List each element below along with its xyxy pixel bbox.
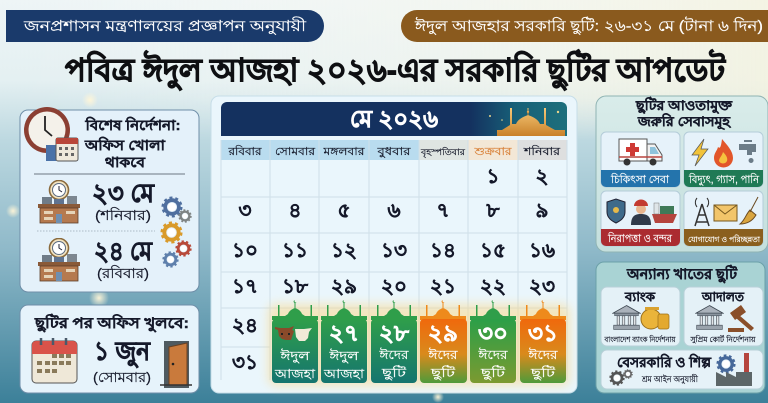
panel: other sectors	[596, 262, 765, 393]
icon: wall calendar	[32, 338, 77, 383]
icon: door	[160, 341, 192, 388]
tile: bank: ব্যাংক	[624, 290, 656, 304]
calendar dates: ১০	[232, 240, 258, 262]
tile: communication and sanitation	[684, 191, 763, 246]
panel: reopening date	[20, 305, 199, 393]
holiday tile: 29 Eid holiday: ছুটি	[430, 365, 457, 381]
icon: shield	[607, 199, 625, 223]
top right ribbon: holiday range: ঈদুল আজহার সরকারি ছুটি: ২৬-৩১ মে (টানা ৬ দিন)	[414, 17, 763, 35]
date: 1 June: (সোমবার)	[93, 369, 151, 385]
tile: court	[684, 287, 763, 346]
tile: utilities: বিদ্যুৎ, গ্যাস, পানি	[688, 173, 759, 186]
panel: calendar	[211, 96, 577, 393]
icon: small gears	[610, 370, 632, 385]
tile: security and ports: নিরাপত্তা ও বন্দর	[607, 232, 673, 245]
calendar dates: ৮	[486, 200, 501, 222]
icon: firefighter	[631, 200, 651, 225]
holiday tile: 31 Eid holiday: ছুটি	[530, 365, 557, 381]
icon: flame	[714, 139, 733, 168]
holiday tile: 29 Eid holiday: ২৯	[428, 320, 458, 346]
heading: other sectors: অন্যান্য খাতের ছুটি	[626, 264, 738, 284]
icon: cargo ship	[652, 203, 677, 223]
calendar dates: ৩	[238, 200, 252, 222]
weekday headers: মঙ্গলবার	[322, 146, 366, 158]
weekday headers: শনিবার	[523, 145, 561, 158]
tile: security and ports	[601, 191, 680, 246]
heading: exempt services: ছুটির আওতামুক্ত	[635, 96, 734, 115]
calendar dates: ১৬	[529, 240, 555, 262]
top right ribbon: holiday range	[401, 10, 768, 42]
date: 1 June	[93, 336, 151, 385]
icon: gavel	[728, 305, 754, 332]
icon: cow and goat	[275, 326, 312, 341]
icon: office desk 23 May	[38, 180, 80, 223]
calendar dates: ১৪	[430, 240, 456, 262]
icon: clock and calendar	[24, 107, 78, 161]
tile: bank: বাংলাদেশ ব্যাংক নির্দেশনায়	[604, 335, 676, 344]
calendar dates: ১৭	[232, 276, 258, 298]
weekday headers: বুধবার	[376, 146, 412, 158]
panel: exempt emergency services	[596, 96, 768, 252]
calendar dates: ৩১	[232, 352, 258, 374]
holiday tile: 26 Eid ul Adha: আজহা	[274, 367, 315, 381]
heading: special instruction: থাকবে	[105, 154, 146, 170]
holiday tile: 26 Eid ul Adha	[272, 300, 318, 383]
icon: bank building	[613, 306, 640, 329]
holiday tile: 29 Eid holiday	[420, 300, 467, 383]
tile: communication and sanitation: যোগাযোগ ও পরিচ্ছন্নতা	[688, 235, 761, 244]
holiday tile: 27 Eid ul Adha	[321, 300, 367, 383]
weekday headers: শুক্রবার	[473, 146, 513, 158]
calendar header	[221, 102, 567, 136]
calendar dates: ২৩	[529, 276, 555, 298]
top left ribbon: ministry notice	[6, 10, 324, 42]
heading: exempt services: জরুরি সেবাসমূহ	[637, 112, 732, 131]
title: পবিত্র ঈদুল আজহা ২০২৬-এর সরকারি ছুটির আপডেট	[65, 49, 726, 91]
tile: court: আদালত	[701, 290, 746, 304]
weekday headers: বৃহস্পতিবার	[420, 147, 466, 158]
date: 23 May: (শনিবার)	[95, 207, 151, 223]
holiday tile: 31 Eid holiday: ঈদের	[527, 347, 559, 362]
holiday tile: 30 Eid holiday: ঈদের	[477, 347, 509, 362]
holiday tile: 28 Eid holiday: ঈদের	[378, 347, 410, 362]
date: 24 May: ২৪ মে	[94, 236, 153, 266]
tile: private sector and industry: শ্রম আইন অনুযায়ী	[641, 373, 698, 385]
holiday tile: 31 Eid holiday: ৩১	[528, 320, 558, 346]
heading: special instruction	[84, 116, 180, 170]
date: 24 May: (রবিবার)	[97, 265, 149, 281]
holiday tile: 26 Eid ul Adha: ঈদুল	[279, 348, 310, 364]
calendar dates: ১২	[331, 240, 357, 262]
holiday tile: 30 Eid holiday	[470, 300, 516, 383]
holiday tile: 28 Eid holiday: ২৮	[379, 320, 410, 346]
tile: private sector and industry: বেসরকারি ও শিল্প	[617, 353, 712, 370]
icon: gears	[162, 198, 191, 267]
tile: medical	[601, 132, 680, 187]
icon: ambulance	[619, 139, 662, 166]
calendar dates	[232, 166, 555, 374]
date: 1 June: ১ জুন	[94, 336, 151, 368]
calendar dates: ২২	[480, 276, 506, 298]
calendar dates: ১১	[282, 240, 308, 262]
icon: office desk 24 May	[38, 238, 80, 281]
holiday tile: 28 Eid holiday	[371, 300, 417, 383]
date: 23 May: ২৩ মে	[92, 178, 155, 208]
calendar dates: ২৯	[331, 276, 357, 298]
holiday tile: 31 Eid holiday	[520, 300, 566, 383]
tile: court: সুপ্রিম কোর্ট নির্দেশনায়	[689, 334, 756, 344]
tile: utilities	[684, 132, 763, 187]
calendar dates: ২১	[430, 276, 456, 298]
icon: lightning	[692, 139, 708, 166]
tile: medical: চিকিৎসা সেবা	[610, 173, 670, 186]
date: 23 May	[92, 178, 155, 223]
calendar dates: ১	[487, 166, 499, 188]
top left ribbon: ministry notice: জনপ্রশাসন মন্ত্রণালয়ের প্রজ্ঞাপন অনুযায়ী	[23, 17, 307, 35]
icon: radio tower	[695, 198, 709, 226]
calendar dates: ৪	[289, 200, 301, 222]
icon: court building	[696, 306, 723, 329]
calendar grid	[221, 140, 567, 380]
tile: private sector and industry	[601, 350, 763, 389]
holiday tile: 27 Eid ul Adha: আজহা	[323, 367, 364, 381]
calendar dates: ৫	[338, 200, 350, 222]
panel: office open notice	[20, 107, 199, 292]
icon: golden mosque	[489, 108, 565, 136]
date: 24 May	[94, 236, 153, 281]
holiday tile: 27 Eid ul Adha: ঈদুল	[328, 348, 359, 364]
tile: bank	[601, 287, 680, 346]
icon: broom	[740, 197, 758, 224]
icon: coins	[641, 307, 669, 329]
weekday headers	[221, 140, 567, 160]
calendar dates: ২০	[381, 276, 407, 298]
holiday tile: 29 Eid holiday: ঈদের	[427, 347, 459, 362]
icon: factory and gear	[716, 353, 752, 386]
holiday glow	[268, 304, 570, 386]
heading: special instruction: অফিস খোলা	[84, 136, 166, 153]
holiday tile: 30 Eid holiday: ৩০	[478, 320, 508, 346]
weekday headers: সোমবার	[275, 146, 316, 158]
holiday tile: 28 Eid holiday: ছুটি	[381, 365, 408, 381]
calendar dates: ৬	[387, 200, 401, 222]
calendar dates: ২	[535, 166, 549, 188]
heading: office reopens: ছুটির পর অফিস খুলবে:	[34, 313, 189, 333]
calendar dates: ৯	[536, 200, 548, 222]
weekday headers: রবিবার	[227, 145, 263, 158]
holiday tile: 30 Eid holiday: ছুটি	[480, 365, 507, 381]
calendar header: মে ২০২৬	[350, 106, 438, 133]
calendar dates: ১৮	[282, 276, 309, 298]
calendar dates: ৭	[436, 200, 450, 222]
calendar dates: ২৪	[232, 315, 258, 337]
calendar dates: ১৫	[480, 240, 506, 262]
icon: water tap	[739, 140, 756, 163]
holiday tile: 27 Eid ul Adha: ২৭	[329, 320, 359, 346]
icon: envelope	[714, 205, 737, 221]
heading: exempt services	[635, 96, 734, 131]
heading: special instruction: বিশেষ নির্দেশনা:	[84, 116, 180, 133]
calendar dates: ১৩	[381, 240, 407, 262]
